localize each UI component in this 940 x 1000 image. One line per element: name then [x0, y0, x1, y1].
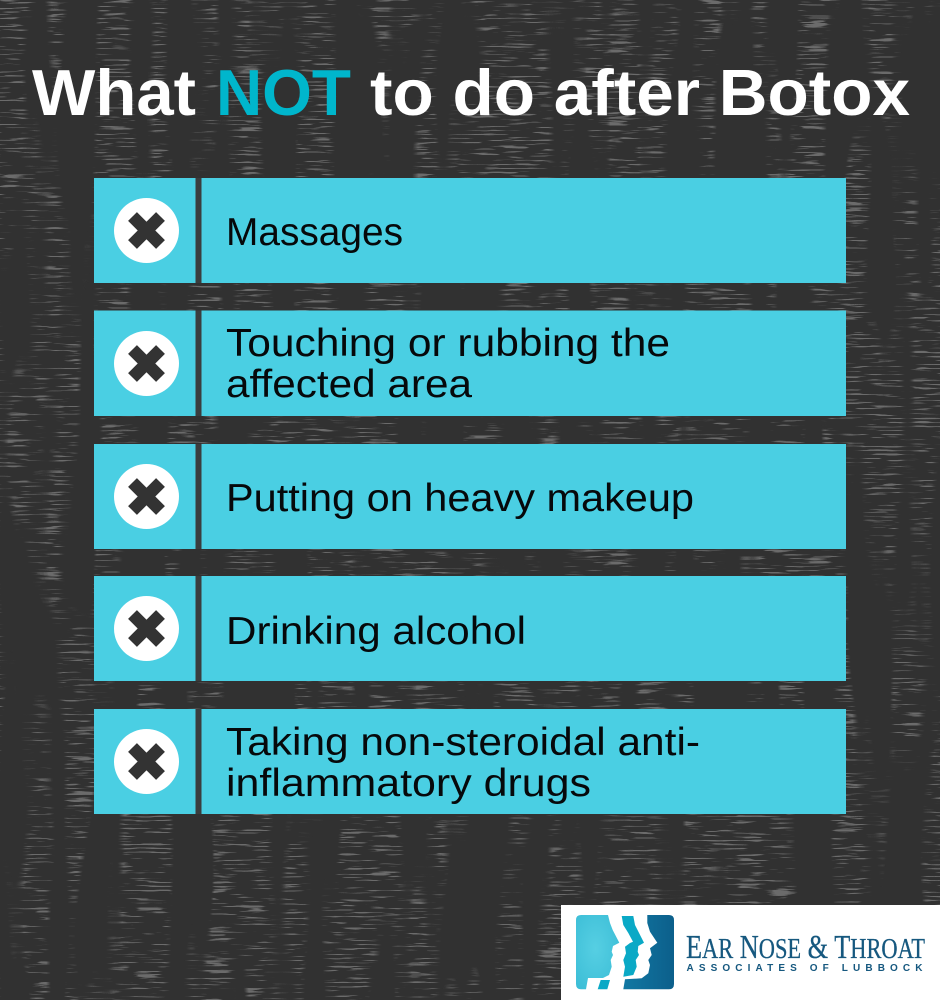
list row: Putting on heavy makeup [94, 444, 846, 549]
item text: Massages [226, 211, 403, 254]
item text: Putting on heavy makeup [226, 477, 694, 520]
item text: Touching or rubbing the [226, 322, 670, 365]
title [32, 56, 910, 129]
item text: inflammatory drugs [226, 762, 591, 805]
item text [226, 322, 670, 406]
title: to do after Botox [370, 56, 910, 129]
icon: X in circle [114, 198, 179, 263]
icon: X in circle [114, 729, 179, 794]
icon: X in circle [114, 331, 179, 396]
icon: X in circle [114, 464, 179, 529]
list row: Taking NSAIDs [94, 709, 846, 814]
list row: Touching or rubbing [94, 310, 846, 416]
item text: affected area [226, 363, 472, 406]
list row: Massages [94, 178, 846, 283]
item text: Drinking alcohol [226, 610, 526, 653]
item text [226, 721, 700, 805]
title: What [32, 56, 196, 129]
logo panel [561, 905, 940, 1000]
logo mark: three face profiles [576, 915, 674, 989]
list row: Drinking alcohol [94, 576, 846, 681]
item text: Taking non-steroidal anti- [226, 721, 700, 764]
logo text: ASSOCIATES OF LUBBOCK [686, 963, 923, 974]
logo text: EAR NOSE & THROAT [686, 929, 925, 966]
title: NOT [216, 56, 351, 129]
icon: X in circle [114, 596, 179, 661]
